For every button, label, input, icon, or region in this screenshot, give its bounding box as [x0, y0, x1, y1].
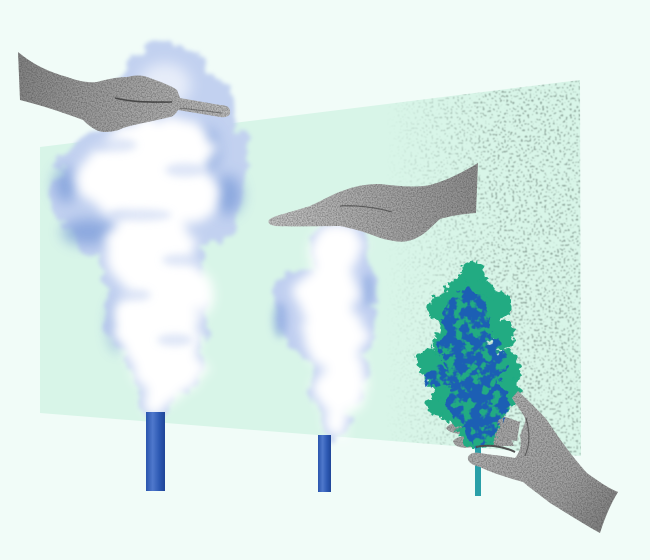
tree crown — [416, 262, 520, 448]
small smoke plume — [272, 222, 378, 438]
small plume blue body — [272, 222, 378, 438]
icon: hand holding tree — [468, 391, 618, 533]
icon: tree trunk — [475, 440, 481, 496]
chimney pipe: small — [318, 435, 331, 492]
plume deep blue shading — [54, 128, 242, 351]
plume pale upper billows — [139, 63, 191, 107]
crown green foliage — [416, 262, 520, 448]
plume billow shadows — [93, 138, 205, 346]
icon: hand capping large plume — [18, 52, 230, 132]
small plume deep shading — [273, 274, 374, 338]
chimney pipe: large — [146, 412, 165, 491]
icon: hand capping small plume — [268, 163, 478, 242]
plume white billows — [77, 116, 218, 415]
plume blue body — [51, 42, 246, 416]
small plume white billows — [293, 224, 367, 438]
large smoke plume — [51, 42, 246, 416]
panel: green backdrop — [40, 80, 581, 456]
crown blue shading — [424, 290, 508, 446]
icon: hand fingers behind tree — [446, 415, 520, 448]
stippled texture on backdrop — [398, 80, 581, 456]
